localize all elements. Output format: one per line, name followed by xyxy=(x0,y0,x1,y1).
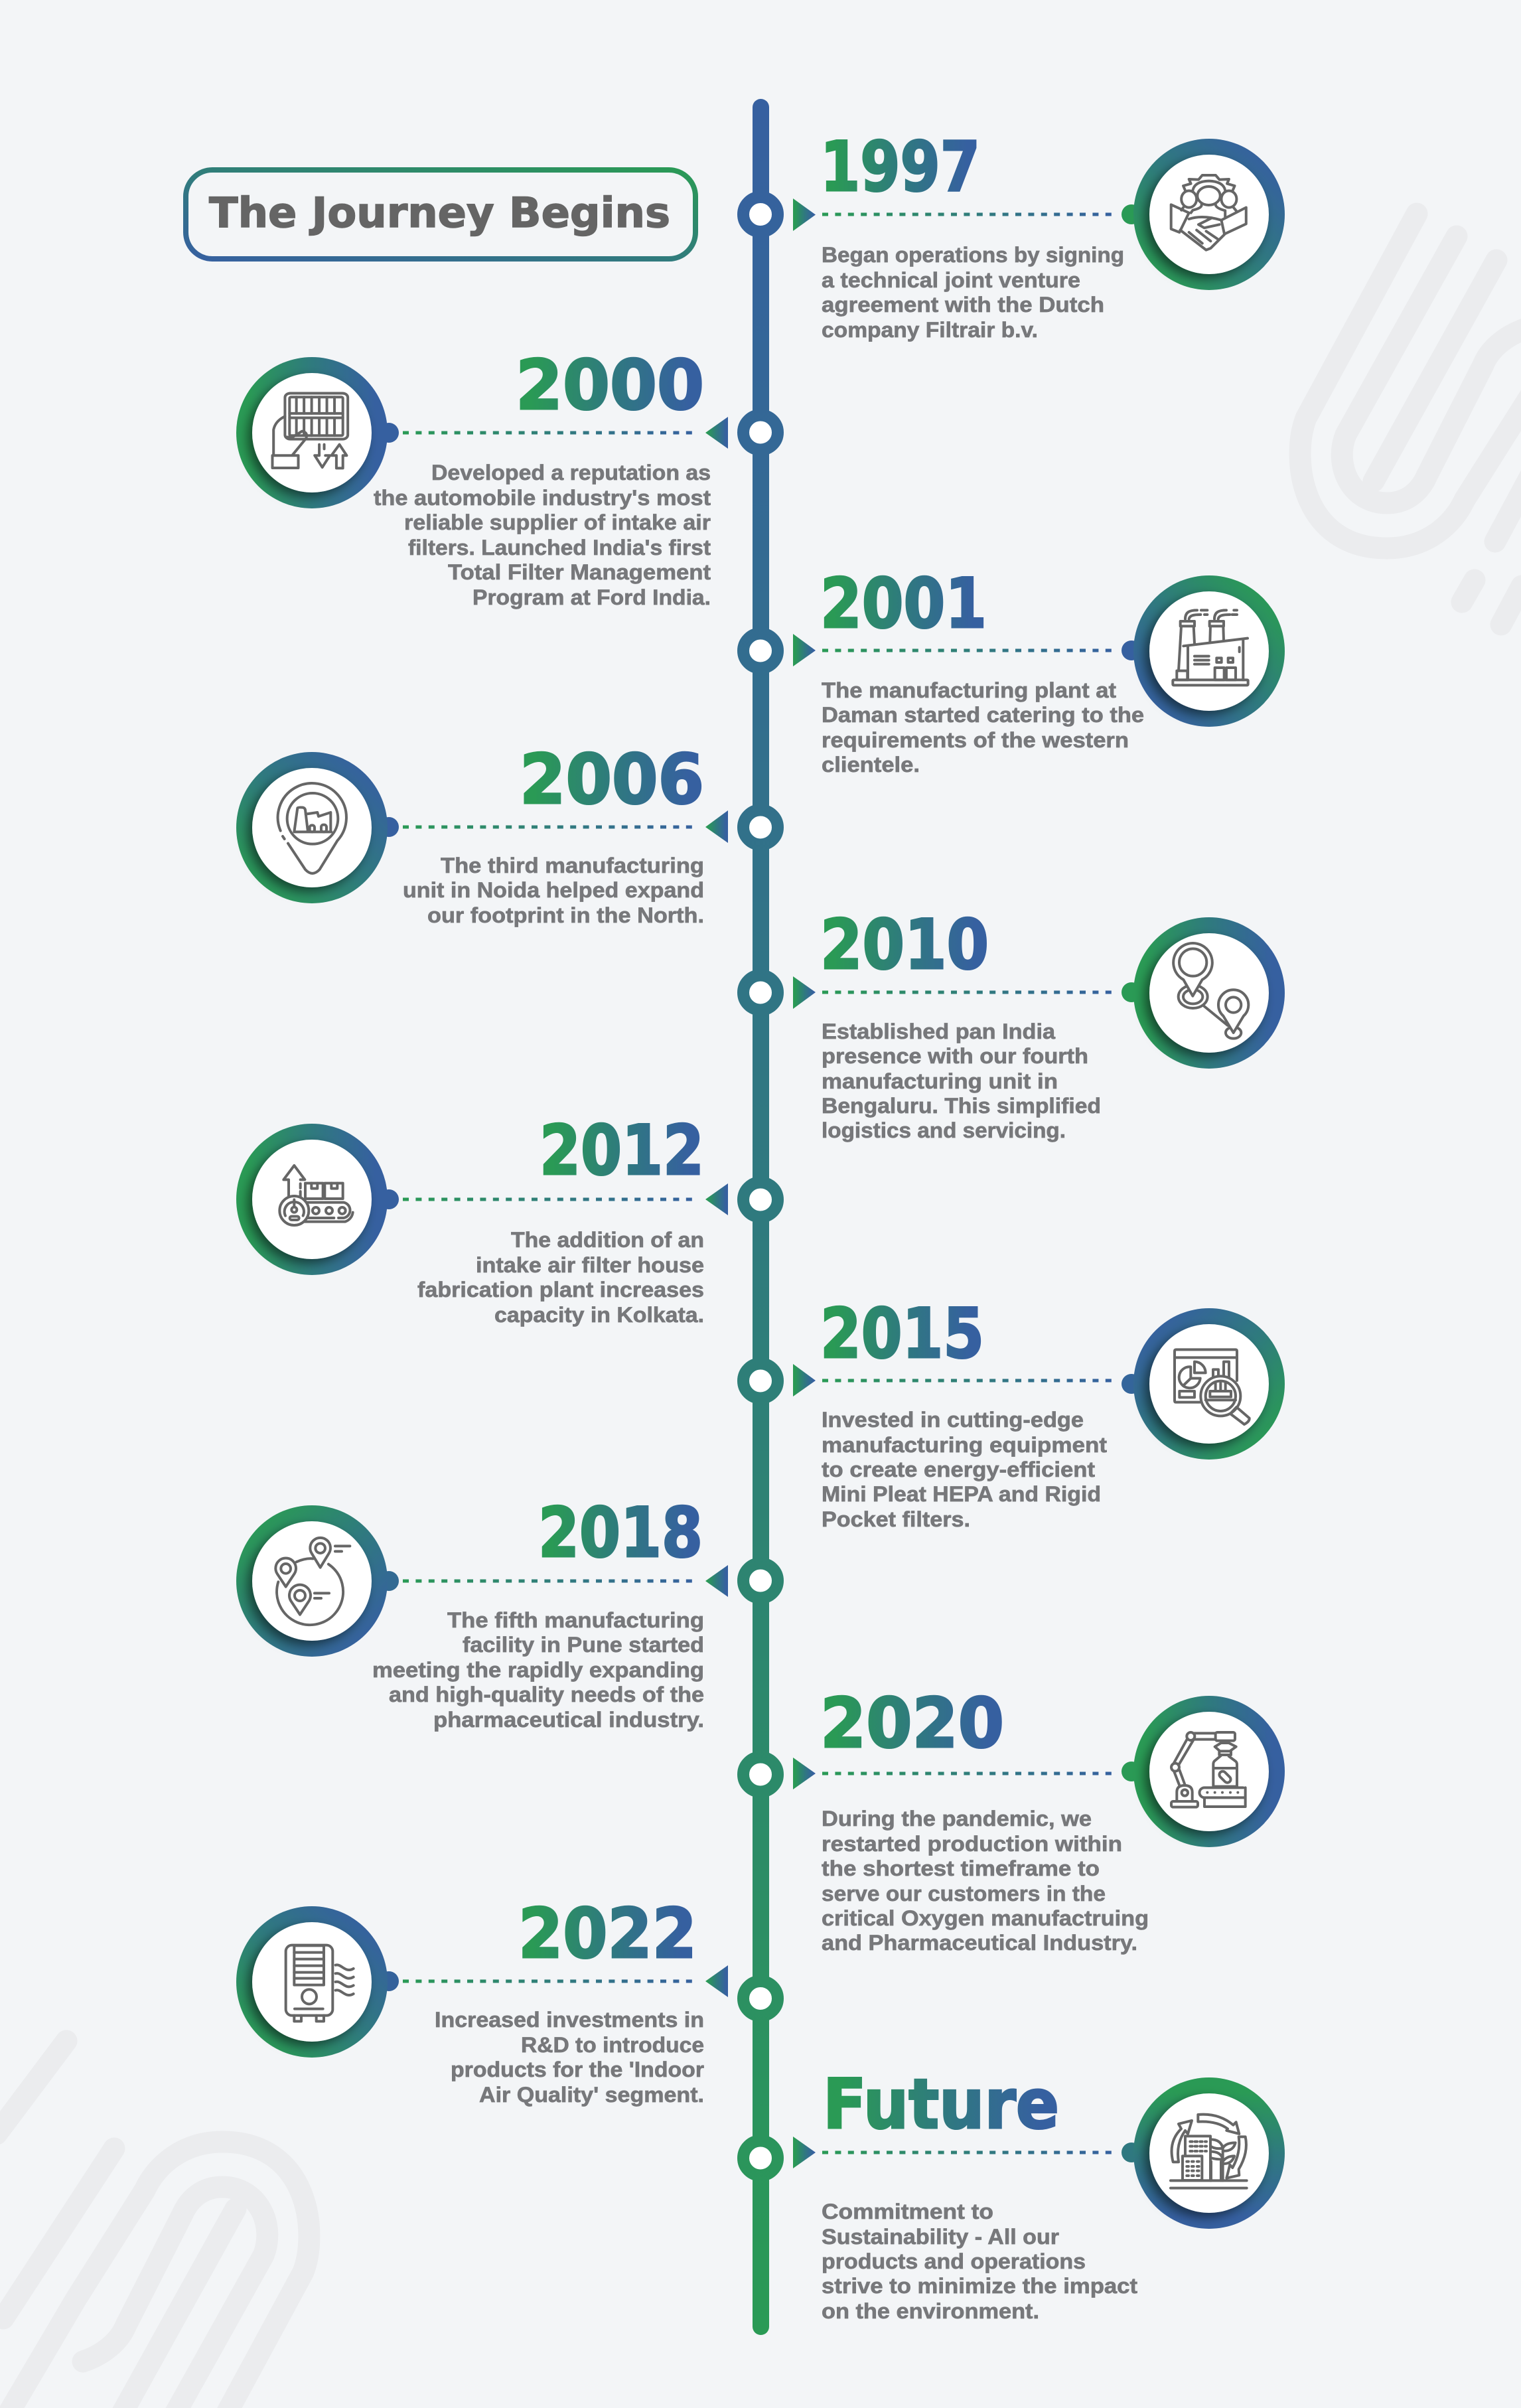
description 2020: the shortest timeframe to xyxy=(822,1856,1100,1880)
description Future: Commitment to xyxy=(822,2200,993,2223)
description 2015: Pocket filters. xyxy=(822,1507,970,1531)
year 2006: 2006 xyxy=(520,740,704,820)
milestone: 2006 xyxy=(236,740,728,927)
description 2000: filters. Launched India's first xyxy=(408,536,711,560)
description 2015: Invested in cutting-edge xyxy=(822,1408,1084,1432)
description 2015: Mini Pleat HEPA and Rigid xyxy=(822,1482,1101,1506)
description 1997: agreement with the Dutch xyxy=(822,293,1104,317)
badge 1997 xyxy=(1122,139,1285,290)
description 2015 xyxy=(822,1408,1107,1531)
milestone: 2015 xyxy=(793,1294,1285,1531)
badge Future xyxy=(1122,2077,1285,2229)
description 2020: serve our customers in the xyxy=(822,1882,1106,1906)
description 2012: fabrication plant increases xyxy=(417,1278,704,1302)
background watermark: top right xyxy=(1300,214,1521,625)
description 2001: Daman started catering to the xyxy=(822,703,1144,727)
milestone: 2022 xyxy=(236,1894,728,2107)
badge 2001 xyxy=(1122,575,1285,727)
arrow and dotted connector 2022 xyxy=(403,1965,728,1997)
description 2018: The fifth manufacturing xyxy=(447,1608,704,1632)
description 1997: company Filtrair b.v. xyxy=(822,318,1038,342)
badge 2006 xyxy=(236,752,399,903)
year 2000: 2000 xyxy=(516,346,704,425)
description 2022: Increased investments in xyxy=(435,2008,704,2032)
description 2018: pharmaceutical industry. xyxy=(433,1708,704,1732)
description 2001: clientele. xyxy=(822,753,920,777)
arrow and dotted connector 2012 xyxy=(403,1183,728,1215)
description 2010: logistics and servicing. xyxy=(822,1118,1066,1142)
title: The Journey Begins: The Journey Begins xyxy=(209,188,670,237)
arrow and dotted connector 2018 xyxy=(403,1565,728,1597)
milestone: 2018 xyxy=(236,1493,728,1732)
year 2020: 2020 xyxy=(820,1684,1004,1764)
description 2000: Developed a reputation as xyxy=(431,461,711,485)
badge 2010 xyxy=(1122,917,1285,1069)
description 2010: manufacturing unit in xyxy=(822,1069,1058,1093)
icon: handshake with team and gear xyxy=(1171,175,1246,250)
title: The Journey Begins xyxy=(186,170,695,259)
description 2020 xyxy=(822,1807,1149,1955)
description 2012 xyxy=(417,1228,704,1327)
description 2000 xyxy=(374,461,711,609)
description 2022: products for the 'Indoor xyxy=(451,2058,704,2081)
icon: two map pins xyxy=(1173,943,1248,1039)
description 2020: restarted production within xyxy=(822,1832,1122,1856)
timeline spine xyxy=(743,99,778,2335)
milestone: 2010 xyxy=(793,905,1285,1142)
year 2018: 2018 xyxy=(538,1493,703,1573)
milestone: Future xyxy=(793,2065,1285,2323)
description Future: strive to minimize the impact xyxy=(822,2274,1137,2298)
description 2015: manufacturing equipment xyxy=(822,1433,1107,1457)
description Future: on the environment. xyxy=(822,2299,1039,2323)
description 2006 xyxy=(403,854,704,927)
icon: hand holding air filter xyxy=(272,393,348,468)
description 2018: meeting the rapidly expanding xyxy=(372,1658,704,1682)
description 1997 xyxy=(822,243,1124,342)
description 2020: and Pharmaceutical Industry. xyxy=(822,1931,1137,1955)
icon: factory location pin xyxy=(278,783,346,873)
description Future xyxy=(822,2200,1137,2323)
year 2012: 2012 xyxy=(540,1111,704,1191)
badge 2018 xyxy=(236,1505,399,1657)
description 1997: Began operations by signing xyxy=(822,243,1124,267)
icon: conveyor belt with gauge xyxy=(279,1166,353,1225)
milestone: 1997 xyxy=(793,127,1285,342)
description 2000: reliable supplier of intake air xyxy=(404,510,711,534)
description 2001: The manufacturing plant at xyxy=(822,678,1116,702)
icon: route with three pins xyxy=(275,1538,350,1625)
milestone: 2001 xyxy=(793,564,1285,777)
description 2010: presence with our fourth xyxy=(822,1044,1088,1068)
icon: air purifier xyxy=(286,1945,354,2021)
icon: factory xyxy=(1173,610,1248,685)
arrow and dotted connector 1997 xyxy=(793,198,1118,231)
description Future: products and operations xyxy=(822,2249,1086,2273)
description 2022: R&D to introduce xyxy=(521,2033,704,2057)
description 2018: facility in Pune started xyxy=(463,1633,704,1657)
year 2001: 2001 xyxy=(820,564,987,644)
description 2012: capacity in Kolkata. xyxy=(494,1303,704,1327)
badge 2020 xyxy=(1122,1696,1285,1847)
milestone: 2020 xyxy=(793,1684,1285,1955)
year 1997: 1997 xyxy=(820,127,980,207)
description 2012: The addition of an xyxy=(511,1228,704,1252)
description 2020: critical Oxygen manufactruing xyxy=(822,1906,1149,1930)
description 2000: the automobile industry's most xyxy=(374,486,711,510)
description 2006: unit in Noida helped expand xyxy=(403,878,704,902)
year 2022: 2022 xyxy=(518,1894,697,1974)
description 2001: requirements of the western xyxy=(822,728,1129,752)
milestone: 2012 xyxy=(236,1111,728,1327)
description 2000: Program at Ford India. xyxy=(472,585,711,609)
description 2010: Bengaluru. This simplified xyxy=(822,1094,1101,1118)
description 2006: our footprint in the North. xyxy=(427,903,704,927)
description 1997: a technical joint venture xyxy=(822,268,1080,292)
icon: sustainable city with recycling arrows xyxy=(1171,2115,1247,2188)
arrow and dotted connector 2001 xyxy=(793,634,1118,666)
year 2010: 2010 xyxy=(820,905,989,985)
badge 2022 xyxy=(236,1906,399,2058)
description 2006: The third manufacturing xyxy=(441,854,704,877)
description 2020: During the pandemic, we xyxy=(822,1807,1092,1831)
description 2012: intake air filter house xyxy=(476,1253,704,1277)
arrow and dotted connector 2006 xyxy=(403,810,728,843)
description 2018: and high-quality needs of the xyxy=(389,1683,704,1706)
description 2010: Established pan India xyxy=(822,1019,1055,1043)
arrow and dotted connector 2010 xyxy=(793,976,1118,1009)
arrow and dotted connector 2020 xyxy=(793,1758,1118,1789)
arrow and dotted connector 2000 xyxy=(403,417,728,449)
arrow and dotted connector Future xyxy=(793,2137,1118,2168)
year label Future: Future xyxy=(823,2065,1059,2145)
description 2010 xyxy=(822,1019,1101,1142)
badge 2000 xyxy=(236,357,399,508)
icon: robot arm filling bottle xyxy=(1171,1732,1246,1807)
badge 2012 xyxy=(236,1124,399,1275)
arrow and dotted connector 2015 xyxy=(793,1364,1118,1396)
badge 2015 xyxy=(1122,1308,1285,1460)
description 2018 xyxy=(372,1608,704,1732)
description 2000: Total Filter Management xyxy=(448,560,711,584)
year 2015: 2015 xyxy=(820,1294,984,1374)
background watermark: bottom left xyxy=(0,2041,309,2408)
description 2001 xyxy=(822,678,1144,777)
icon: analytics dashboard with magnifier xyxy=(1175,1349,1250,1424)
description 2015: to create energy-efficient xyxy=(822,1458,1095,1481)
description Future: Sustainability - All our xyxy=(822,2225,1059,2249)
description 2022 xyxy=(435,2008,704,2107)
description 2022: Air Quality' segment. xyxy=(479,2083,704,2107)
milestone: 2000 xyxy=(236,346,728,609)
